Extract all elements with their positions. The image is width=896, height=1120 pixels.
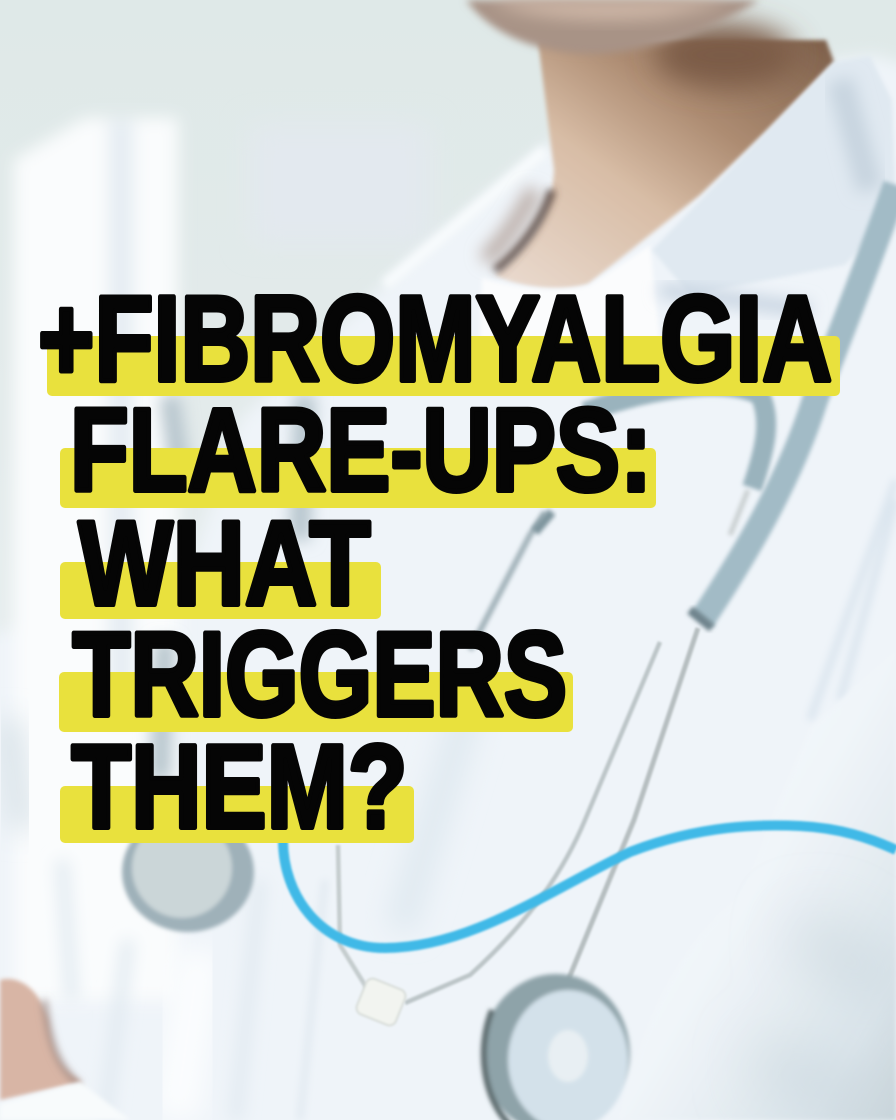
title: FLARE-UPS:	[70, 384, 652, 516]
right coat fold	[810, 480, 896, 720]
hand shadow	[44, 1000, 80, 1085]
dark collar shadow	[495, 190, 552, 270]
right chest piece	[482, 974, 630, 1120]
metal rod right	[560, 628, 698, 1000]
title: WHAT	[78, 496, 370, 630]
left edge shading	[8, 720, 22, 830]
coat under collar shading	[660, 290, 810, 310]
metal rod left	[405, 642, 660, 1003]
title: THEM?	[72, 720, 408, 854]
title highlight: line 2	[60, 448, 656, 508]
left coat folds	[62, 860, 260, 1120]
title highlight: line 5	[60, 786, 414, 843]
title: TRIGGERS	[72, 608, 567, 742]
right sleeve	[618, 650, 896, 1120]
coat shoulder highlight	[385, 150, 545, 285]
stethoscope arch tube	[585, 386, 766, 488]
blurred window column	[14, 118, 178, 1000]
lapel shadow	[160, 395, 305, 780]
main tube band	[690, 610, 712, 628]
title highlight: line 4	[59, 672, 573, 732]
placket edge	[300, 880, 325, 1120]
sleeve shading	[760, 930, 896, 1120]
title highlight: line 3	[60, 562, 381, 619]
undershirt	[480, 245, 660, 340]
coat placket	[175, 950, 200, 1120]
cuff	[0, 1082, 130, 1120]
decorative blue line	[283, 825, 896, 948]
metal tube lower left	[338, 845, 368, 990]
lip area	[490, 0, 730, 20]
title highlight: line 1	[47, 336, 840, 396]
left chest piece	[122, 812, 254, 932]
left thin tube	[470, 512, 545, 650]
pale wall patch	[250, 125, 430, 245]
collar shading	[840, 80, 870, 190]
title	[38, 270, 832, 854]
hand	[0, 979, 82, 1100]
under chin shadow	[655, 23, 795, 87]
thin rod under arch	[730, 490, 748, 535]
stethoscope main tube	[702, 185, 896, 620]
central coat shading	[400, 700, 470, 930]
shadow beside collar	[485, 190, 535, 260]
right collar	[652, 56, 896, 295]
left thin tube cap	[535, 512, 552, 532]
neck	[495, 40, 834, 288]
lower face	[466, 0, 760, 54]
tube connector	[354, 977, 408, 1027]
